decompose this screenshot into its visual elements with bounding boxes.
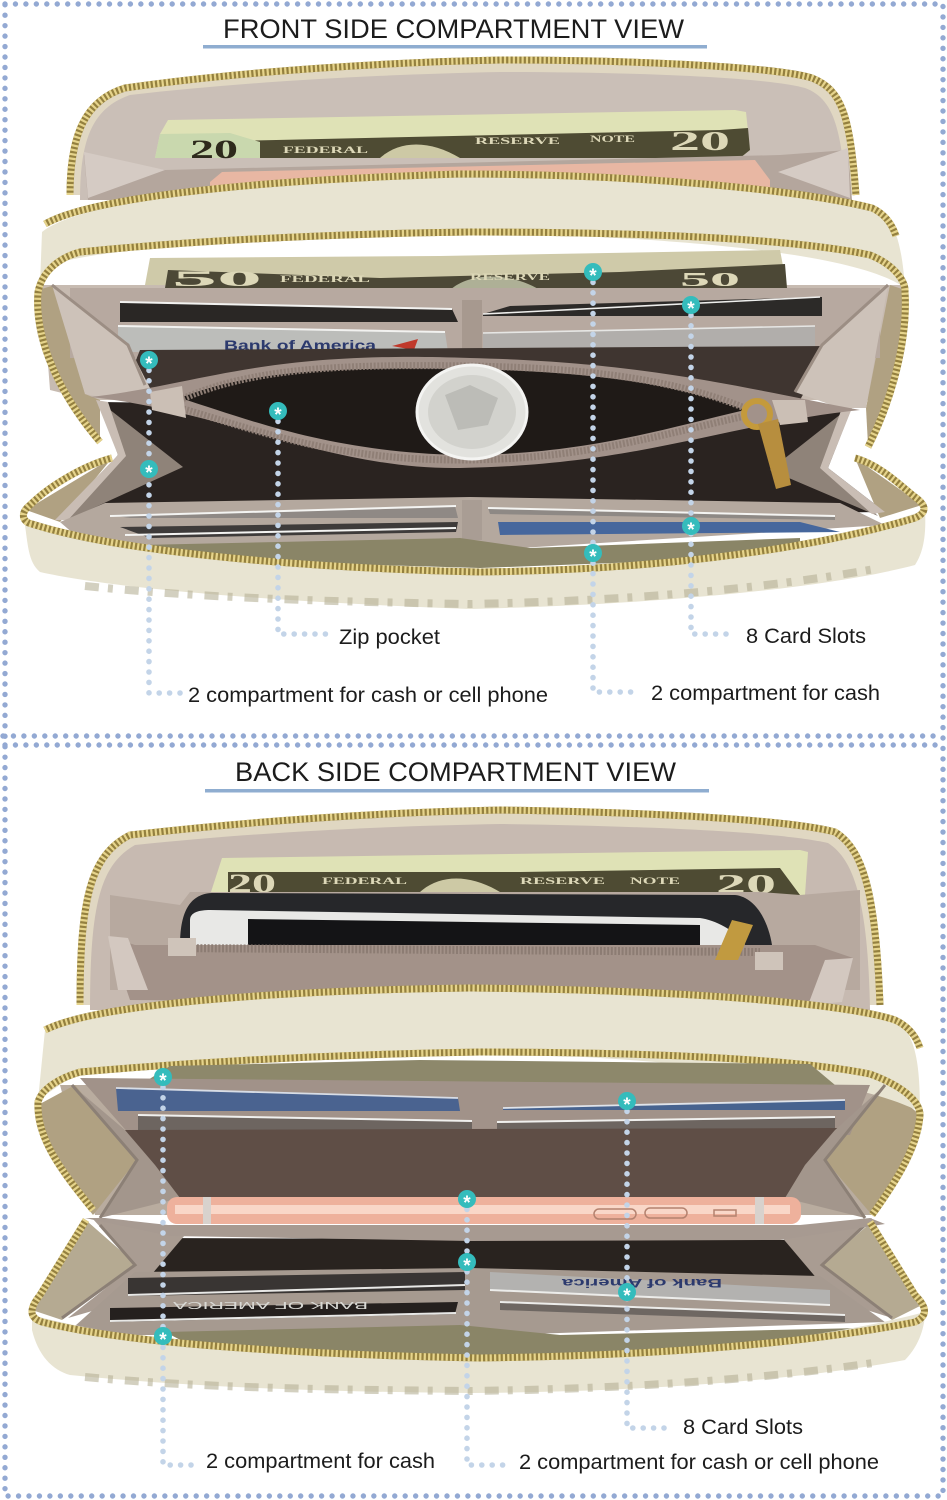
card slots: upper pockets [70,288,880,360]
back half of wallet [70,60,856,195]
callout: 8 card slots: * [623,1286,631,1307]
callout: zip pocket [269,402,440,649]
right lower gusset [780,1218,892,1318]
callout: 2 compartment for cash or cell phone: * [463,1256,471,1277]
callout: 8 card slots [618,1092,803,1439]
lower half leather [32,1312,925,1393]
card slots: upper pockets: Bank of America [224,337,376,353]
interior of front half [60,1085,885,1215]
money: fifty dollar bills: RESERVE [470,272,550,282]
right lower gusset [770,410,878,516]
coin [417,365,527,459]
wallet photo: back side [32,810,925,1393]
cream zip band [40,174,905,288]
phone: rose gold side [167,1197,801,1224]
money: twenty dollar bills [155,110,750,164]
callout: 2 compartment for cash [154,1068,435,1473]
callout: 2 compartment for cash: * [159,1071,167,1092]
lower hinge lining [26,458,112,522]
callout: 8 card slots: * [687,520,695,541]
dark compartment lower [60,402,885,520]
left upper gusset [52,285,150,398]
cream zip band [38,988,920,1112]
money: twenty dollar bills [210,850,808,899]
panel: front side compartment view [23,14,925,707]
money: twenty dollar bills: RESERVE [520,877,605,887]
central flap [85,1218,885,1241]
brown compartment [125,1128,840,1200]
money: twenty dollar bills: RESERVE [475,137,560,147]
zip pocket [90,357,860,468]
lower zipper [32,1220,924,1358]
money: twenty dollar bills: 20 [670,126,730,156]
callout: 8 card slots: * [687,299,695,320]
dark compartment upper [120,346,830,400]
lower half leather [24,510,925,609]
money: fifty dollar bills: FEDERAL [280,274,370,284]
callout: 2 compartment for cash or cell phone [458,1190,879,1474]
callout: 8 card slots: 8 Card Slots [683,1416,803,1439]
callout: 2 compartment for cash or cell phone [140,351,548,707]
lower hinge lining [32,1222,137,1320]
left lower gusset [68,1218,185,1318]
callout: 2 compartment for cash: 2 compartment for cash [206,1450,435,1473]
callout: 2 compartment for cash: 2 compartment for cash [651,682,880,705]
heading: front side: FRONT SIDE COMPARTMENT VIEW [223,14,685,44]
money: fifty dollar bills [145,250,787,291]
money: twenty dollar bills: NOTE [630,877,680,887]
back half of wallet [80,810,880,1005]
money: fifty dollar bills: 50 [680,269,740,291]
callout: 2 compartment for cash: * [589,547,597,568]
card slots: lower pockets [60,497,885,568]
money: twenty dollar bills: 20 [228,869,276,898]
interior of front half [42,285,905,400]
heading: back side: BACK SIDE COMPARTMENT VIEW [235,757,677,787]
money: twenty dollar bills: 20 [716,869,776,899]
dark compartment [130,1238,840,1300]
callout: 8 card slots: * [623,1095,631,1116]
zipper pull [744,401,791,489]
panel: back side compartment view [32,757,925,1474]
money edge and card slots upper [80,1060,870,1135]
callout: 2 compartment for cash or cell phone: 2 compartment for cash or cell phone [188,684,548,707]
right gussets [785,1085,885,1218]
card slots lower: Bank of America [561,1276,722,1290]
callout: zip pocket: * [274,405,282,426]
inner pocket with phone edge [84,148,852,200]
right upper gusset [795,285,888,408]
left lower gusset [67,402,183,520]
money: twenty dollar bills: FEDERAL [322,877,407,887]
callout: 8 card slots: 8 Card Slots [746,625,866,648]
money: twenty dollar bills: NOTE [590,135,635,145]
callout: 2 compartment for cash [584,263,880,705]
callout: 2 compartment for cash: * [589,266,597,287]
zip pocket seen from back [108,920,853,1005]
callout: 2 compartment for cash or cell phone: 2 compartment for cash or cell phone [519,1451,879,1474]
callout: 2 compartment for cash or cell phone: * [145,463,153,484]
money: twenty dollar bills: FEDERAL [283,146,368,156]
left gussets [72,1085,180,1218]
phone in back pocket [110,890,860,990]
callout: zip pocket: Zip pocket [339,626,440,649]
card slots lower: BANK OF AMERICA [172,1299,368,1310]
callout: 2 compartment for cash: * [159,1330,167,1351]
wallet photo: front side [23,60,925,609]
callout: 8 card slots [682,296,866,648]
lower zipper [23,458,924,572]
callout: 2 compartment for cash or cell phone: * [463,1193,471,1214]
callout: 2 compartment for cash or cell phone: * [145,354,153,375]
card slots lower [65,1268,885,1358]
money: fifty dollar bills: 50 [172,266,262,291]
money: twenty dollar bills: 20 [190,135,238,164]
